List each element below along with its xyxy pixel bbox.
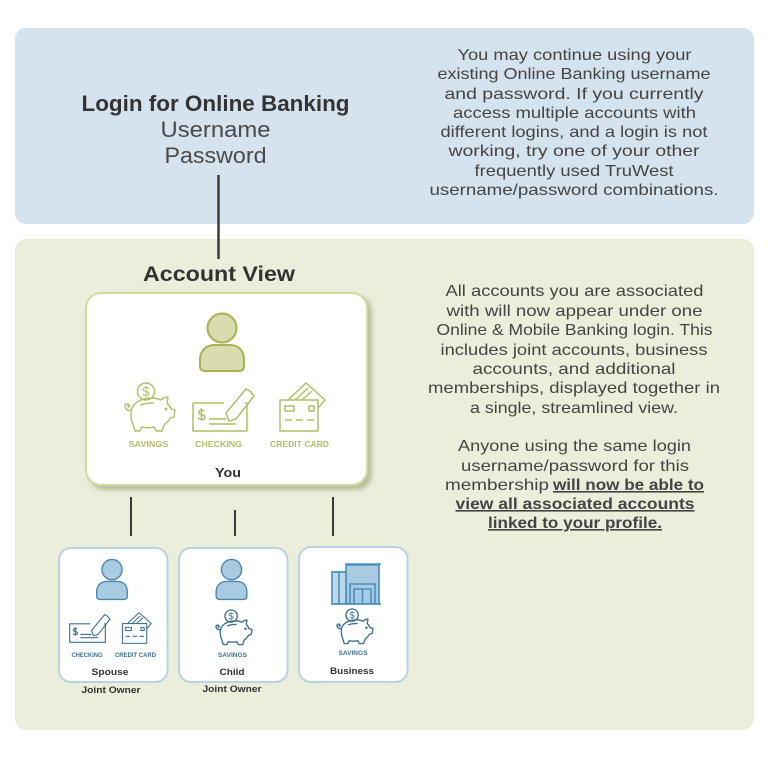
label: savings: SAVINGS (128, 439, 169, 449)
text: accounts explanation: Online & Mobile Banking login. This (436, 322, 712, 339)
connector: you to child (234, 510, 236, 536)
text: accounts explanation: will now be able to (552, 477, 704, 494)
card: business (299, 547, 408, 682)
text: accounts explanation: includes joint accounts, business (440, 342, 708, 359)
card: spouse (59, 548, 168, 682)
icon: building (331, 564, 381, 604)
icon: credit card (122, 613, 151, 643)
text: accounts explanation: Anyone using the same login (458, 438, 691, 455)
icon: piggy bank savings (337, 609, 373, 644)
card: you (86, 293, 367, 485)
heading: account view: Account View (143, 262, 295, 286)
text: accounts explanation: accounts, and additional (472, 361, 676, 378)
icon: person (200, 314, 244, 371)
panel: login (15, 28, 754, 224)
text: accounts explanation: a single, streamlined view. (470, 400, 678, 417)
text: login explanation: different logins, and a login is not (440, 124, 708, 141)
text: accounts explanation: All accounts you are associated (446, 283, 704, 300)
label: checking: CHECKING (72, 653, 103, 659)
connector: login to account view (217, 175, 220, 259)
icon: piggy bank savings (216, 610, 252, 645)
text: login explanation: access multiple accounts with (453, 105, 696, 122)
label: savings: SAVINGS (338, 651, 368, 657)
icon: check (70, 615, 110, 642)
text: login explanation: You may continue using your (458, 47, 692, 64)
heading: login for online banking: Username (160, 117, 270, 142)
label: business: Business (330, 666, 374, 677)
icon: person (216, 559, 247, 599)
text: accounts explanation: with will now appear under one (445, 303, 703, 320)
label: spouse joint owner: Joint Owner (82, 685, 141, 696)
text: accounts explanation: memberships, displayed together in (428, 380, 720, 397)
text: login explanation: existing Online Banking username (438, 66, 711, 83)
text: login explanation: and password. If you currently (444, 86, 704, 103)
icon: credit card (280, 383, 325, 431)
text: login explanation: frequently used TruWest (474, 163, 674, 180)
text: accounts explanation: linked to your profile. (488, 515, 662, 532)
text: login explanation (430, 47, 718, 199)
icon: person (97, 559, 127, 599)
text: accounts explanation: membership (445, 477, 549, 494)
text: accounts explanation (428, 283, 720, 532)
connector: you to spouse (130, 497, 132, 536)
label: credit card: CREDIT CARD (115, 653, 157, 659)
label: you: You (215, 466, 241, 480)
icon: check (193, 389, 254, 431)
text: login explanation: working, try one of your other (447, 143, 700, 160)
label: checking: CHECKING (195, 439, 242, 449)
label: child joint owner: Joint Owner (202, 684, 262, 695)
label: credit card: CREDIT CARD (270, 439, 329, 449)
heading: login for online banking (82, 91, 350, 168)
text: login explanation: username/password combinations. (430, 182, 718, 199)
connector: you to business (332, 497, 334, 536)
label: spouse: Spouse (92, 667, 128, 678)
text: accounts explanation: view all associated accounts (456, 496, 695, 513)
icon: piggy bank savings (125, 383, 175, 431)
label: savings: SAVINGS (218, 653, 247, 659)
card: child (179, 548, 288, 682)
panel: account view (15, 239, 754, 730)
heading: login for online banking: Password (164, 143, 266, 168)
label: child: Child (220, 667, 245, 678)
heading: login for online banking: Login for Online Banking (82, 91, 350, 116)
text: accounts explanation: username/password for this (461, 458, 689, 475)
